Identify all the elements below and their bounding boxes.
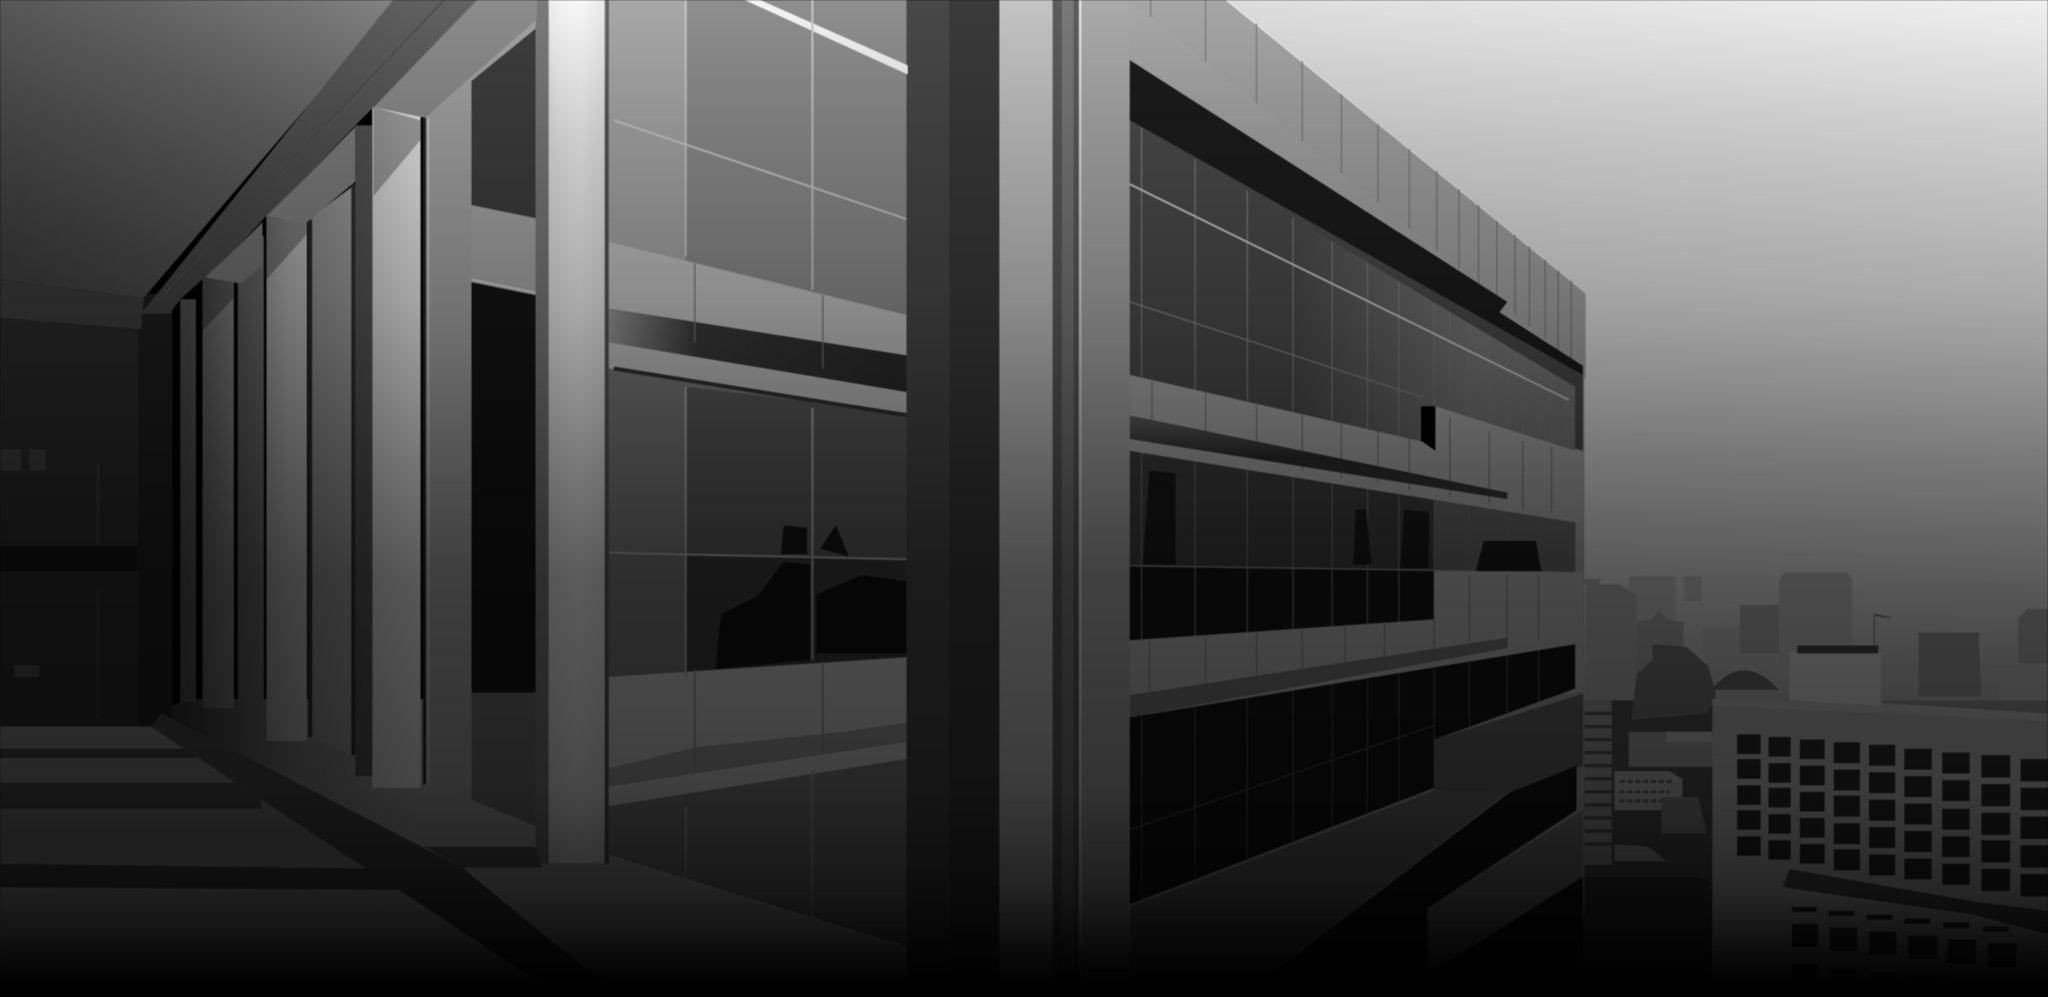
right building: left side face <box>1081 0 1130 997</box>
spandrel band with pipe <box>609 242 906 413</box>
second reveal soffit <box>266 127 355 222</box>
upper left lighter pane column <box>609 0 686 261</box>
light vertical column <box>999 0 1053 997</box>
dark vertical columns <box>905 0 999 997</box>
band panels below row 2 <box>1130 571 1583 717</box>
top reveal soffit <box>374 0 537 118</box>
upper canopy fin <box>1130 60 1583 375</box>
canopy fin 2 <box>1130 416 1507 499</box>
right building: bands between window rows <box>1081 0 1584 997</box>
wall rail <box>0 546 137 571</box>
central metal strip <box>1053 0 1081 997</box>
pillar shoulder between reveals <box>355 125 372 129</box>
bottom glass panes <box>609 759 906 946</box>
glass grid lines <box>609 0 908 930</box>
wall sign <box>0 449 46 470</box>
upper glass panes <box>609 0 906 315</box>
ceiling <box>0 0 398 298</box>
dark floor channel <box>150 713 627 997</box>
corridor room wall <box>0 294 172 727</box>
corridor floor <box>0 713 627 997</box>
left darkening overlay <box>0 0 418 997</box>
window row 2 <box>1129 450 1576 640</box>
white slanted strip <box>744 0 908 74</box>
lower annex building <box>1783 887 2048 997</box>
band panels below row 1 <box>1130 375 1583 524</box>
distant city skyline <box>1580 572 2048 717</box>
lower bands, fin and window rows <box>1130 694 1583 997</box>
corner glass facade <box>609 0 908 946</box>
lower spandrel band <box>609 657 906 806</box>
third reveal soffit <box>205 222 263 284</box>
lit ledge and floor beside the windows <box>162 699 906 997</box>
rooftop penthouse <box>1789 652 1881 706</box>
window row 3 <box>1129 644 1576 904</box>
window head beam and soffits <box>141 0 537 314</box>
main corner column <box>536 0 609 864</box>
door frame line <box>97 464 99 719</box>
right building: upper parapet panels <box>1130 0 1586 379</box>
low haze band <box>1584 575 2048 719</box>
lower dark panes with reflections <box>609 525 906 677</box>
corridor pillars <box>180 107 421 788</box>
corridor windows between pillars <box>238 20 536 826</box>
sky <box>1176 0 2048 997</box>
middle glass panes <box>609 368 906 559</box>
wall socket <box>14 665 39 677</box>
window row 1 <box>1129 120 1584 451</box>
middle-distance city blocks <box>1578 644 1757 997</box>
ceiling cove band <box>0 280 144 329</box>
foreground building with window grid <box>1712 646 2048 997</box>
canopy fin 3 <box>1130 638 1507 717</box>
